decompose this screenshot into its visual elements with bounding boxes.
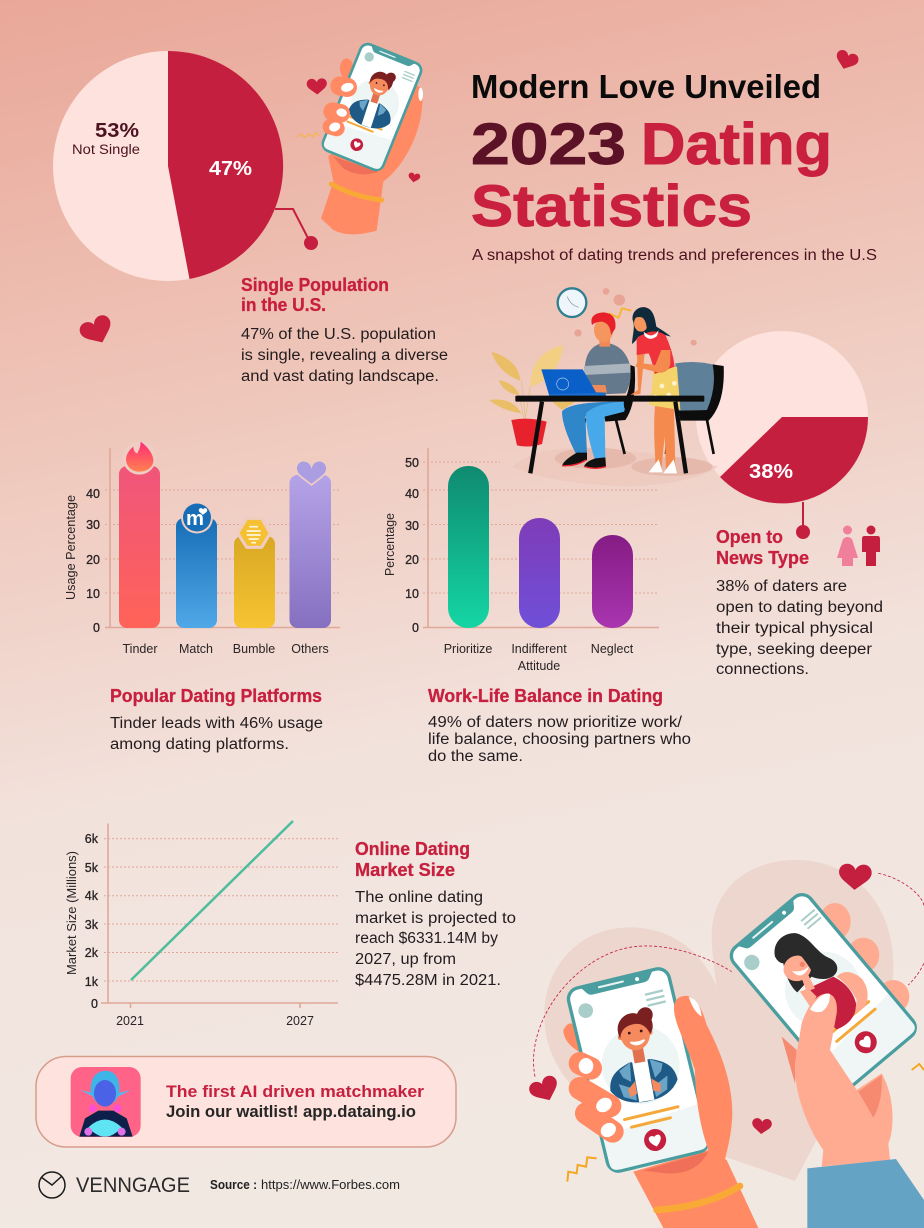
y axis labels: 20: [86, 553, 100, 567]
left hand arm: [633, 1150, 758, 1228]
text block: single population: and vast dating landscape.: [241, 368, 439, 385]
y axis labels: 4k: [85, 889, 99, 903]
title block: Dating: [641, 112, 832, 177]
text block: work-life balance: 49% of daters now prioritize work/: [428, 714, 683, 731]
y axis labels: 50: [405, 456, 419, 470]
pie chart: single population: [53, 51, 318, 281]
y axis labels: 40: [405, 487, 419, 501]
pie chart: single population: 47%: [209, 158, 252, 180]
bars: [119, 466, 331, 628]
title block: A snapshot of dating trends and preferences in the U.S: [472, 247, 877, 264]
bracelet: [657, 1186, 740, 1210]
pie chart: single population: 53%: [95, 120, 139, 142]
y axis labels: 30: [86, 518, 100, 532]
category labels: Match: [179, 642, 213, 656]
y axis labels: 0: [93, 621, 100, 635]
category labels: [123, 642, 329, 656]
woman: [785, 952, 862, 1028]
category labels: Indifferent: [511, 642, 567, 656]
text block: market size: The online dating: [355, 889, 483, 906]
y axis labels: 0: [412, 621, 419, 635]
y axis labels: [405, 456, 419, 635]
text block: open to new type: their typical physical: [716, 620, 873, 637]
text block: open to new type: type, seeking deeper: [716, 641, 872, 658]
logo: venngage: VENNGAGE: [76, 1174, 190, 1197]
text block: open to new type: 38% of daters are: [716, 578, 847, 595]
x axis labels: [116, 1014, 314, 1028]
y axis labels: [86, 487, 100, 635]
y axis labels: 30: [405, 519, 419, 533]
man: [602, 1026, 680, 1104]
text block: work-life balance: Work-Life Balance in Dating: [428, 686, 663, 706]
y axis labels: 40: [86, 487, 100, 501]
text block: popular dating platforms: Tinder leads with 46% usage: [110, 715, 323, 732]
category labels: Neglect: [591, 642, 634, 656]
sparks: [567, 1157, 597, 1182]
y axis labels: 5k: [85, 861, 99, 875]
callout: waitlist banner: Join our waitlist! app.dataing.io: [166, 1103, 416, 1121]
category labels: Bumble: [233, 642, 275, 656]
text block: popular dating platforms: among dating platforms.: [110, 736, 289, 753]
text block: market size: reach $6331.14M by: [355, 930, 498, 947]
callout: waitlist banner: The first AI driven matchmaker: [166, 1083, 425, 1101]
title block: Statistics: [471, 174, 752, 239]
icon: large heart left: [77, 313, 117, 349]
heart backdrop: [544, 860, 893, 1181]
y axis labels: 10: [405, 587, 419, 601]
text block: single population: in the U.S.: [241, 295, 326, 315]
hand behind right phone: [819, 903, 909, 1013]
icon: match logo: m: [186, 508, 204, 530]
icon: heart top right: [833, 48, 860, 73]
bar chart: popular dating platforms: Usage Percentage: [63, 495, 78, 600]
text block: single population: is single, revealing a diverse: [241, 347, 448, 364]
right phone: [727, 890, 920, 1093]
y axis labels: 20: [405, 553, 419, 567]
bar chart: work-life balance: Percentage: [382, 513, 397, 576]
y axis labels: [85, 832, 99, 1011]
thumb and palm of right hand: [795, 993, 893, 1167]
text block: open to new type: Open to: [716, 527, 783, 547]
illustration: couple at desk: [489, 288, 724, 487]
text block: open to new type: connections.: [716, 661, 809, 678]
title block: Modern Love Unveiled: [471, 68, 821, 105]
text block: popular dating platforms: [110, 686, 323, 753]
category labels: Tinder: [123, 642, 157, 656]
text block: popular dating platforms: Popular Dating Platforms: [110, 686, 322, 706]
icon: tinder flame: [123, 441, 156, 475]
line chart: market size: Market Size (Millions): [64, 851, 79, 975]
text block: market size: market is projected to: [355, 910, 516, 927]
icon: heart near phone right: [408, 172, 421, 183]
text block: market size: [355, 839, 516, 989]
text block: market size: Online Dating: [355, 839, 470, 859]
text block: single population: Single Population: [241, 275, 389, 295]
category labels: Prioritize: [444, 642, 492, 656]
title block: [471, 68, 877, 264]
y axis labels: 0: [91, 997, 98, 1011]
text block: market size: 2027, up from: [355, 951, 456, 968]
text block: open to new type: [716, 527, 883, 678]
bar chart: work-life balance: [382, 448, 659, 673]
text block: market size: $4475.28M in 2021.: [355, 972, 501, 989]
sleeve: [807, 1159, 924, 1228]
source: Source :: [210, 1178, 257, 1192]
pie chart: open to new type: 38%: [749, 461, 793, 483]
icon: match logo: [181, 502, 213, 534]
text block: open to new type: News Type: [716, 548, 809, 568]
y axis labels: 1k: [85, 975, 99, 989]
icon: AI avatar: [71, 1067, 141, 1137]
illustration: two hands with phones: [527, 860, 924, 1228]
bars: [448, 466, 633, 628]
y axis labels: 3k: [85, 918, 99, 932]
logo: venngage: [39, 1172, 190, 1198]
text block: single population: [241, 275, 448, 385]
dashed path: [534, 873, 924, 1077]
x axis labels: 2021: [116, 1014, 144, 1028]
hearts: [838, 863, 872, 891]
y axis labels: 10: [86, 587, 100, 601]
category labels: [444, 642, 634, 673]
y axis labels: 6k: [85, 832, 99, 846]
category labels: Others: [291, 642, 329, 656]
text block: market size: Market Size: [355, 860, 455, 880]
text block: single population: 47% of the U.S. population: [241, 326, 436, 343]
callout: waitlist banner: [36, 1056, 456, 1147]
title block: 2023: [471, 112, 626, 177]
icon: bumble hexagon: [238, 518, 270, 547]
category labels: Attitude: [518, 659, 560, 673]
icon: woman and man: [837, 526, 880, 566]
pie chart: open to new type: [696, 331, 868, 539]
x axis labels: 2027: [286, 1014, 314, 1028]
line chart: market size: [64, 821, 340, 1028]
text block: work-life balance: life balance, choosing partners who: [428, 731, 691, 748]
y axis labels: 2k: [85, 946, 99, 960]
source: https://www.Forbes.com: [261, 1178, 400, 1192]
icon: heart near phone left: [306, 78, 327, 95]
trend line: [131, 821, 293, 980]
illustration: hand holding phone: [297, 42, 423, 234]
icon: others heart: [296, 461, 327, 485]
left hand thumb and fingers: [674, 996, 732, 1160]
pie chart: single population: Not Single: [72, 142, 140, 157]
text block: work-life balance: do the same.: [428, 748, 523, 765]
text block: work-life balance: [428, 686, 691, 765]
bar chart: popular dating platforms: [63, 441, 340, 656]
text block: open to new type: open to dating beyond: [716, 599, 883, 616]
left phone: [566, 967, 711, 1173]
